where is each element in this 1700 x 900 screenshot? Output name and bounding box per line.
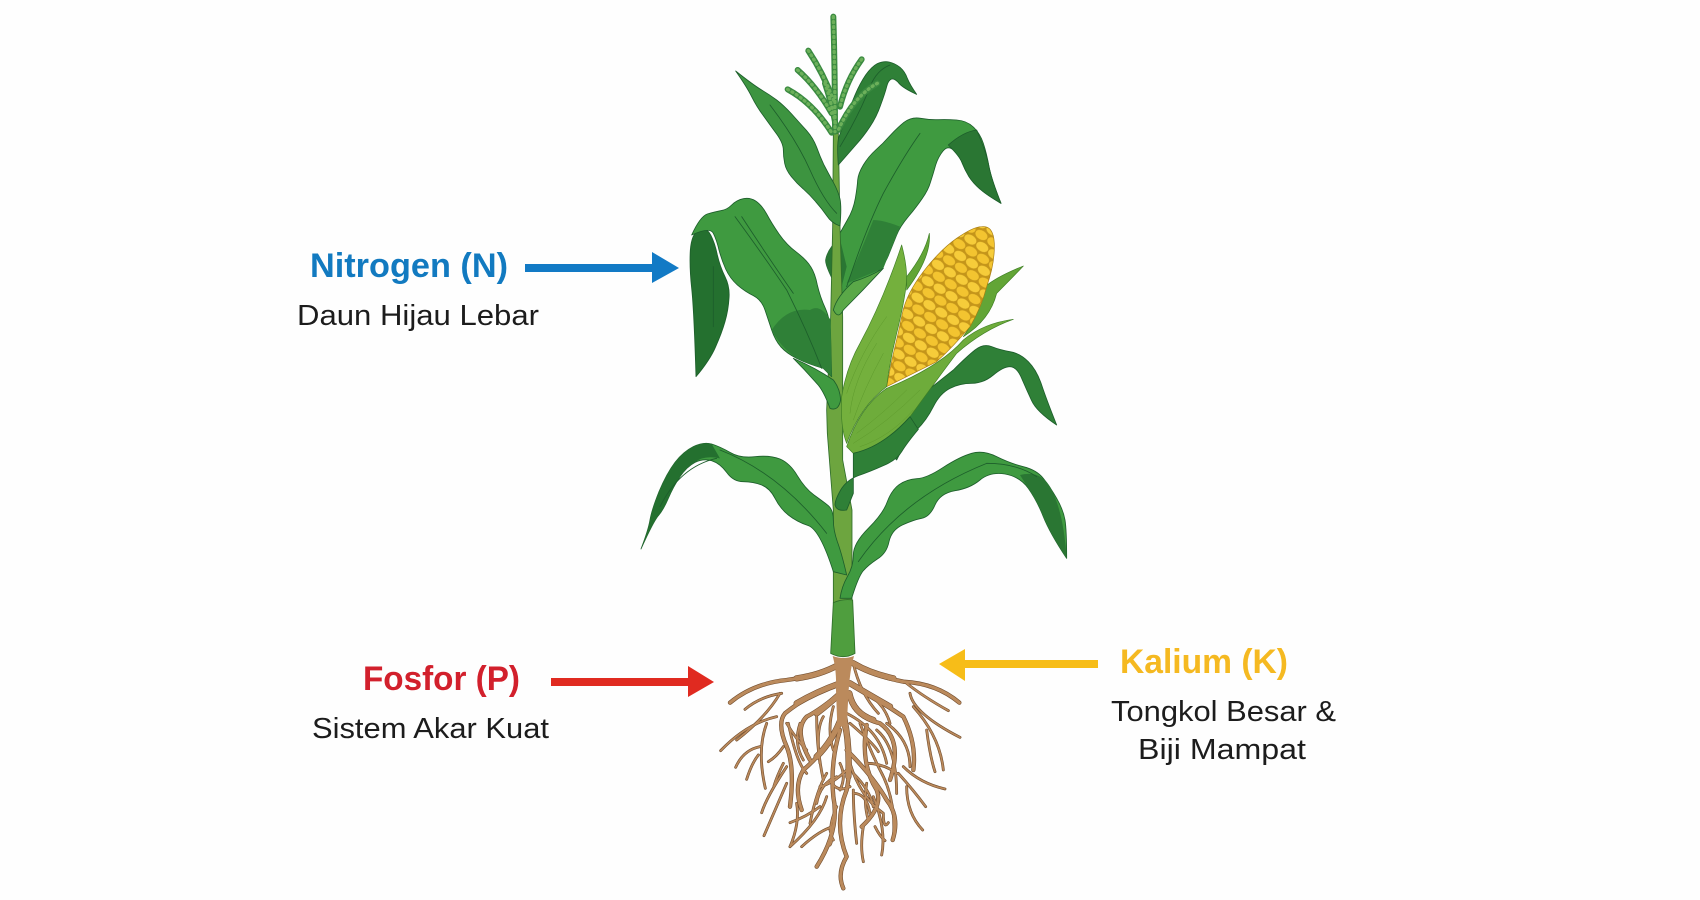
stem: base [831,600,855,657]
leaf: upper right large [826,118,1001,293]
leaf: upper left [736,71,841,226]
corn husk: front [841,245,1013,453]
taproot crown [833,656,854,727]
label: Kalium [1111,643,1344,766]
label: Nitrogen [297,247,539,332]
leaf sheath: middle left [793,358,841,409]
root fill [721,663,960,888]
leaf: middle left, large and broad [690,198,832,377]
arrow: blue [525,252,679,283]
leaf: lower right [840,452,1067,598]
leaf: lower left [641,443,847,575]
roots [721,663,960,888]
heading: Fosfor: Fosfor (P) [363,660,520,698]
corn husk: back [907,233,1023,337]
lower plant: leaves, stem base, roots [641,417,1067,888]
root outline [721,663,960,888]
text: Daun Hijau Lebar: Daun Hijau Lebar [297,300,539,332]
leaf: right lower behind ear [873,346,1057,460]
illustration: corn plant [641,17,1067,888]
heading: Nitrogen: Nitrogen (N) [310,247,508,285]
leaf: top right small [838,62,917,165]
arrow: yellow [939,649,1098,681]
text: Sistem Akar Kuat: Sistem Akar Kuat [312,713,549,745]
text: Tongkol Besar & Biji Mampat: Tongkol Besar & [1111,696,1336,728]
leaf: upper right sheath [833,268,883,315]
label: Fosfor [312,660,549,745]
leaf: lower right of ear [835,417,918,510]
heading: Kalium: Kalium (K) [1120,643,1288,681]
upper plant: leaves, stem, tassel, corn ear [690,17,1057,603]
tassel [788,17,877,133]
text: Tongkol Besar & Biji Mampat: Biji Mampat [1138,734,1306,766]
stem [827,133,852,603]
arrow: red [551,666,714,697]
corn ear [887,227,994,387]
